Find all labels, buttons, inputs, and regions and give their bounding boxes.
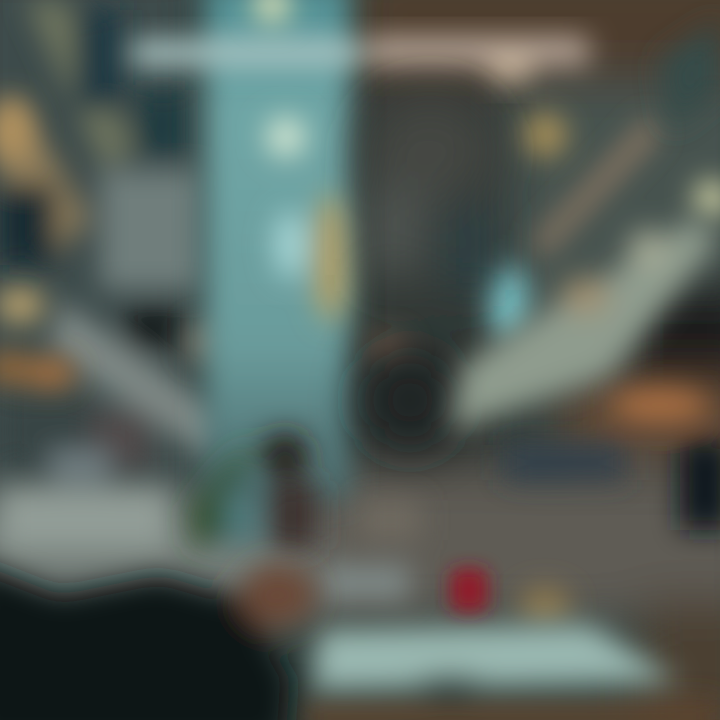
title-like light band — [130, 36, 590, 84]
left shelves — [0, 0, 230, 550]
dark sleeve and hand in foreground — [0, 560, 316, 720]
lower table and small books — [300, 500, 720, 720]
warm lights right — [505, 20, 720, 530]
glowing lamps — [254, 0, 720, 364]
central dark mass — [362, 95, 495, 450]
teal central column — [205, 0, 350, 500]
person reading — [190, 433, 318, 550]
open book on the right — [450, 115, 715, 432]
red object — [450, 568, 488, 612]
warm lights on left — [0, 96, 225, 389]
open book in foreground — [312, 624, 680, 693]
